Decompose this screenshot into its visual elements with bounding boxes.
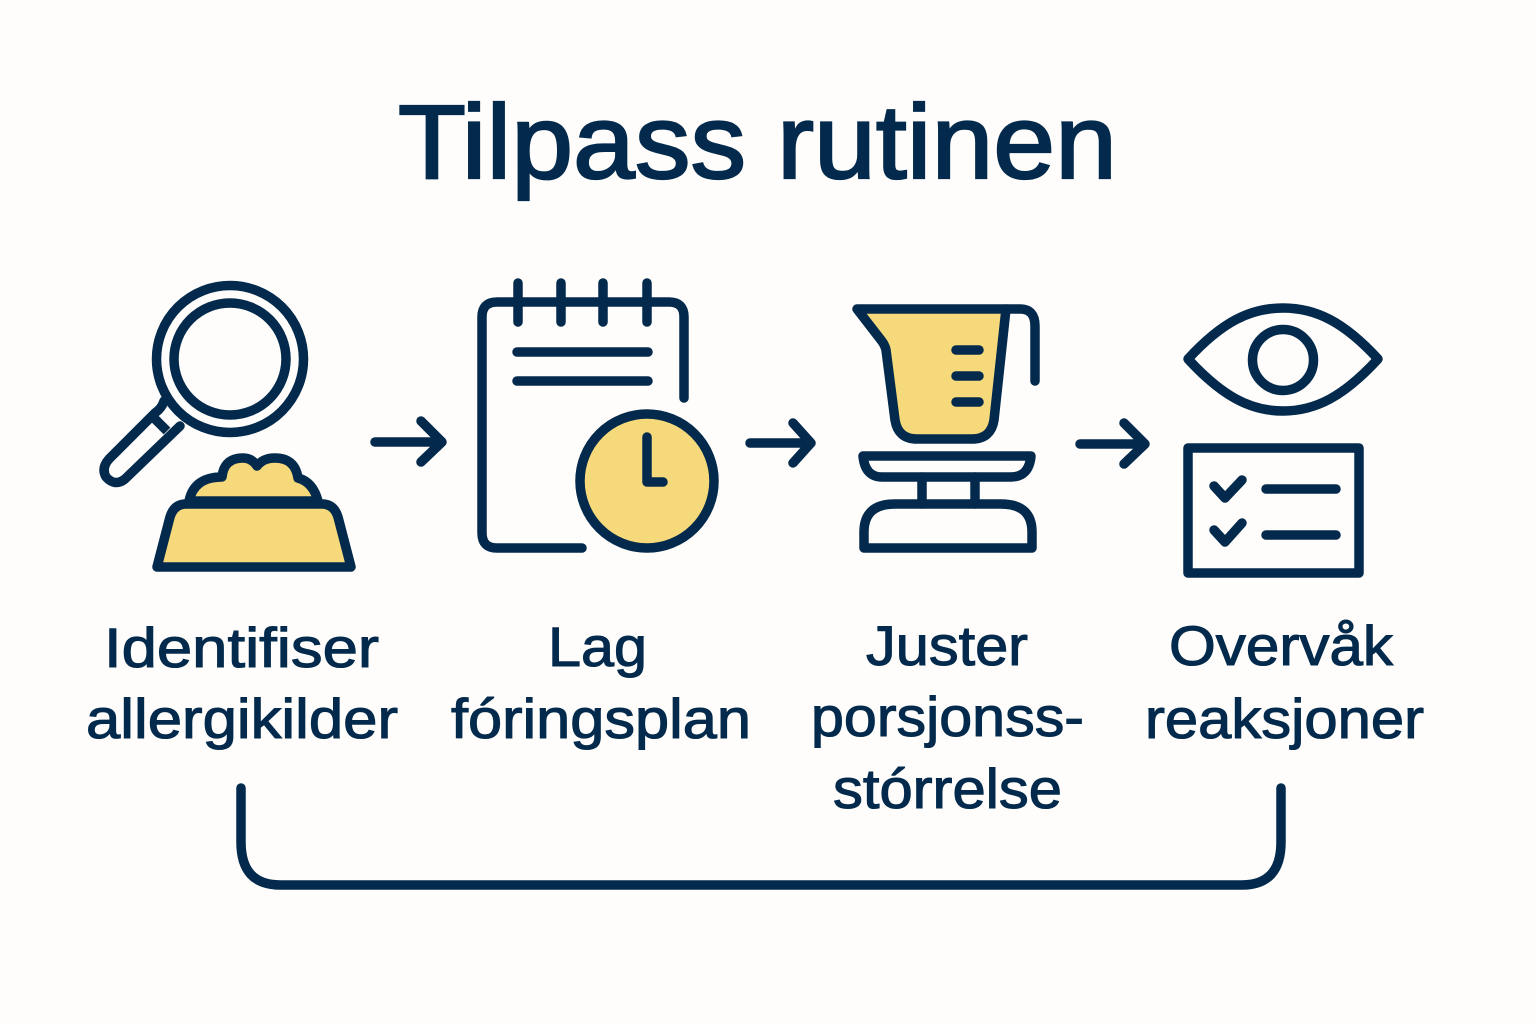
label: step 2 (451, 615, 751, 750)
label: step 4 (1145, 614, 1424, 750)
icon: food bowl (157, 458, 351, 567)
icon: notepad with clock (482, 283, 714, 548)
label: step 2: Lag (548, 615, 647, 678)
label: step 3: Juster (866, 614, 1028, 677)
label: step 3: porsjonss- (811, 685, 1084, 748)
label: step 3 (811, 614, 1084, 820)
arrow: step 3 to step 4 (1080, 423, 1145, 464)
icon: kitchen scale (863, 456, 1032, 548)
title: Tilpass rutinen (398, 84, 1117, 201)
label: step 2: fóringsplan (451, 687, 751, 750)
icon: magnifying glass (104, 286, 304, 483)
icon: clock (580, 414, 714, 548)
label: step 4: Overvåk (1169, 614, 1394, 677)
label: step 1 (86, 616, 398, 750)
label: step 3: stórrelse (833, 757, 1062, 820)
label: step 1: allergikilder (86, 687, 398, 750)
label: step 1: Identifiser (104, 616, 379, 679)
icon: eye (1188, 308, 1378, 411)
icon: notepad (482, 283, 684, 548)
icon: measuring jug (857, 309, 1035, 439)
label: step 4: reaksjoner (1145, 687, 1424, 750)
feedback loop bracket (241, 788, 1281, 885)
arrow: step 1 to step 2 (375, 421, 442, 462)
icon: checklist (1188, 448, 1359, 573)
icon: measuring jug on kitchen scale (857, 309, 1035, 548)
arrow: step 2 to step 3 (750, 423, 811, 463)
icon: eye over checklist (1188, 308, 1378, 573)
icon: magnifying glass over food bowl (104, 286, 351, 567)
